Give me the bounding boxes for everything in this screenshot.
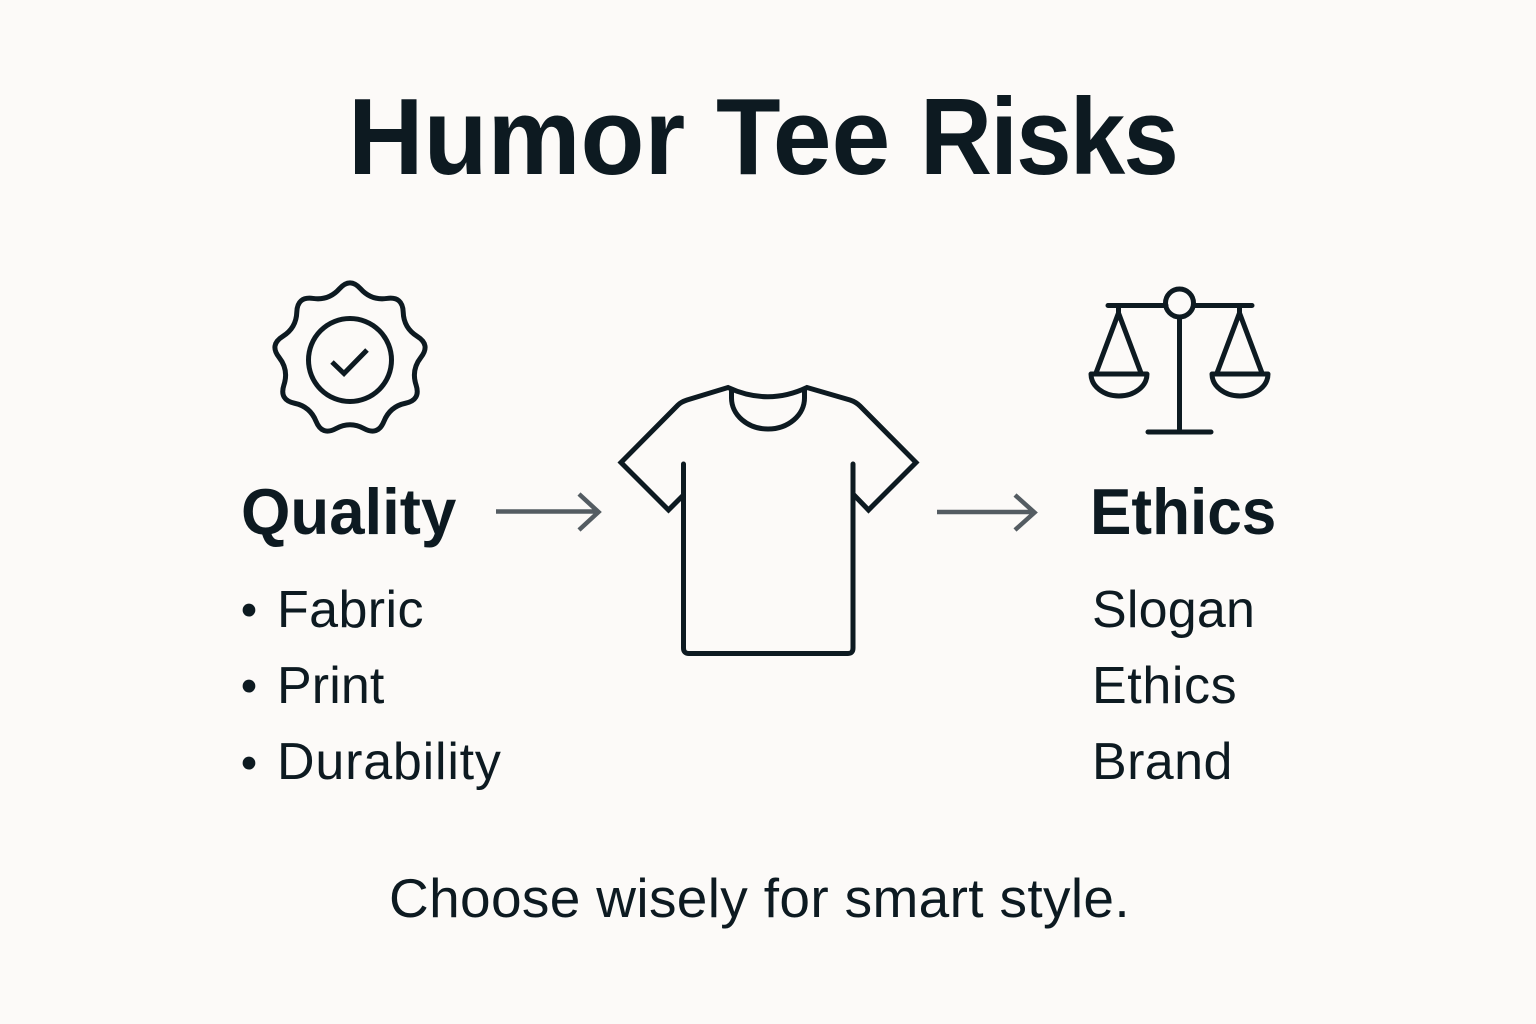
title: Humor (348, 76, 685, 198)
list: quality items (241, 581, 502, 791)
list: ethics items (1092, 581, 1255, 791)
heading: quality: Quality (241, 475, 456, 548)
item: print: • (241, 659, 257, 712)
item: fabric: • (241, 583, 257, 636)
item: durability: • (241, 736, 257, 789)
item: brand: Brand (1092, 733, 1233, 791)
item: print: Print (277, 657, 384, 715)
title: Tee (716, 76, 890, 198)
title: Risks (920, 76, 1177, 198)
heading: ethics: Ethics (1090, 475, 1276, 548)
item: fabric: Fabric (277, 581, 424, 639)
item: durability: Durability (277, 733, 502, 791)
title (348, 76, 1177, 198)
item: slogan: Slogan (1092, 581, 1255, 639)
tagline: Choose wisely for smart style. (389, 867, 1130, 929)
item: ethics: Ethics (1092, 657, 1237, 715)
